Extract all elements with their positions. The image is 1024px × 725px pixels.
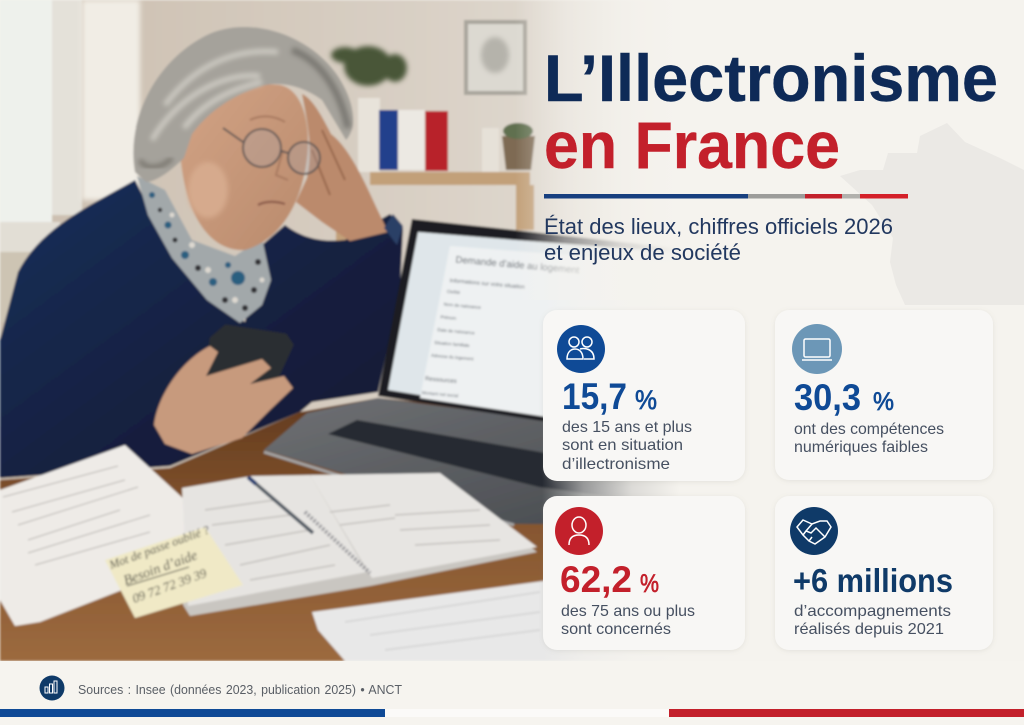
- stat description: numériques faibles: [794, 439, 928, 456]
- laptop bezel: [378, 219, 700, 445]
- scarf: [137, 176, 271, 323]
- stat description: [562, 419, 692, 473]
- title line 2: en France: [544, 108, 840, 182]
- card: 15,7 %: [543, 310, 745, 481]
- hair: [133, 27, 353, 182]
- loose paper: [312, 560, 700, 661]
- form text: Prénom: [440, 314, 457, 321]
- form text: Situation familiale: [434, 340, 470, 348]
- form text: Informations sur votre situation: [449, 278, 525, 291]
- form text: Date de naissance: [437, 327, 475, 335]
- glasses: [223, 128, 320, 174]
- stat description: des 15 ans et plus: [562, 419, 692, 436]
- stat description: réalisés depuis 2021: [794, 621, 944, 638]
- room background: [0, 0, 700, 661]
- stat description: d’accompagnements: [794, 603, 951, 620]
- wall frame: [464, 20, 527, 95]
- sweater cuff: [384, 214, 403, 245]
- stat description: [794, 603, 951, 638]
- icon: laptop: [792, 324, 842, 374]
- sticky note: [105, 523, 243, 618]
- icon: bar chart: [40, 676, 64, 700]
- tricolour rule: [544, 194, 908, 198]
- sources: Sources : Insee (données 2023, publication 2025) • ANCT: [78, 682, 402, 697]
- card: 62,2 %: [543, 496, 745, 650]
- form text: Montant net social: [422, 390, 459, 398]
- handwritten papers: [0, 445, 235, 626]
- laptop screen: [388, 232, 700, 440]
- laptop: [264, 219, 700, 525]
- stat description: [794, 421, 944, 456]
- subtitle line 1: État des lieux, chiffres officiels 2026: [544, 214, 893, 239]
- form panel: [420, 246, 700, 440]
- form text: Demande d’aide au logement: [455, 255, 580, 276]
- stat +6 millions: +6 millions: [793, 562, 953, 599]
- plain right panel: [680, 0, 1024, 661]
- stat 62,2 %: 62,2 %: [560, 559, 659, 600]
- stat 15,7 %: 15,7%: [562, 376, 657, 417]
- photo: woman struggling with online form: [0, 0, 700, 661]
- card: +6 millions: [775, 496, 993, 650]
- icon: handshake: [790, 507, 838, 555]
- sticky note: Mot de passe oublié ?: [106, 523, 211, 572]
- tricolour footer bar: [0, 709, 1024, 717]
- sweater: [0, 180, 403, 478]
- form text: Civilité: [447, 289, 461, 295]
- title: [544, 41, 998, 182]
- base front lip: [264, 452, 514, 525]
- subtitle: [544, 214, 893, 265]
- sticky note: 09 72 72 39 39: [130, 565, 209, 606]
- map of France watermark: [840, 123, 1024, 305]
- icon: person: [555, 507, 603, 555]
- title line 1: L’Illectronisme: [544, 41, 998, 115]
- stat description: sont en situation: [562, 437, 683, 454]
- phone: [208, 327, 291, 400]
- card: 30,3 %: [775, 310, 993, 480]
- hand on head: [296, 94, 388, 241]
- icon: people: [557, 325, 605, 373]
- form text: Nom de naissance: [443, 302, 482, 310]
- spiral notebook: [182, 473, 537, 616]
- stat 30,3 %: 30,3 %: [794, 377, 894, 418]
- form text: [422, 253, 580, 408]
- stat description: des 75 ans ou plus: [561, 603, 695, 620]
- face: [180, 84, 308, 250]
- fade of photo into panel, upper part: [515, 0, 680, 300]
- hand holding phone: [154, 346, 293, 454]
- stat description: d’illectronisme: [562, 456, 670, 473]
- form text: Adresse du logement: [431, 353, 475, 362]
- table: [0, 398, 700, 661]
- laptop base: [264, 398, 700, 525]
- stat description: [561, 603, 695, 638]
- pen: [248, 477, 313, 533]
- subtitle line 2: et enjeux de société: [544, 240, 741, 265]
- stat description: ont des compétences: [794, 421, 944, 438]
- keyboard: [328, 420, 700, 510]
- stat description: sont concernés: [561, 621, 671, 638]
- shelf with flag binder: [336, 100, 535, 280]
- sticky note: Besoin d’aide: [122, 548, 200, 589]
- plant: [331, 46, 407, 108]
- fade of photo into panel, lower part: [542, 300, 680, 661]
- footer band: [0, 661, 1024, 725]
- form text: Ressources: [425, 376, 457, 385]
